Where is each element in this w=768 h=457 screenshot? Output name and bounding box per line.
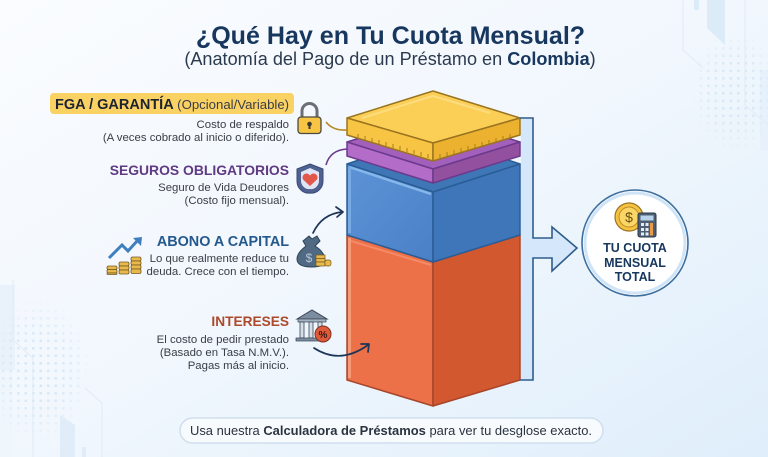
block stack [347, 91, 520, 406]
circle label: TOTAL [615, 270, 656, 284]
title: ¿Qué Hay en Tu Cuota Mensual? [196, 22, 585, 50]
footer pill [180, 418, 603, 443]
label: abono a capital [147, 234, 289, 278]
layer: fga [347, 91, 520, 161]
subtitle: (Anatomía del Pago de un Préstamo en Colombia) [184, 49, 596, 69]
label: abono a capital: deuda. Crece con el tiempo. [147, 266, 289, 278]
label: seguros [110, 162, 289, 207]
label: intereses: INTERESES [211, 314, 289, 329]
connector: fga [326, 122, 347, 130]
icon: shield [297, 164, 323, 193]
label: fga: Costo de respaldo [197, 119, 289, 131]
connector: intereses [314, 344, 369, 356]
layer: seguros [347, 115, 520, 183]
label: seguros: Seguro de Vida Deudores [158, 182, 289, 194]
circle label: MENSUAL [604, 256, 666, 270]
label: abono a capital: ABONO A CAPITAL [157, 234, 289, 250]
connector: capital [313, 207, 343, 233]
connector: seguros [326, 149, 347, 165]
layer: intereses [347, 235, 520, 406]
icon: bank with percent: % [319, 330, 328, 341]
circle label [603, 241, 667, 284]
label: fga: (A veces cobrado al inicio o diferido). [103, 132, 289, 144]
icon: money bag [297, 236, 331, 267]
circle label: TU CUOTA [603, 241, 667, 255]
bracket arrow [520, 118, 577, 380]
label: fga: FGA / GARANTÍA (Opcional/Variable) [55, 96, 289, 113]
label: fga [50, 93, 294, 144]
footer pill: Usa nuestra Calculadora de Préstamos para ver tu desglose exacto. [190, 423, 592, 438]
total circle [582, 190, 688, 296]
icon: bank with percent [296, 310, 331, 342]
label: seguros: (Costo fijo mensual). [185, 195, 289, 207]
label: intereses: Pagas más al inicio. [188, 360, 289, 372]
icon: coin and calculator: $ [625, 209, 633, 225]
icon: growth arrow and coins [107, 237, 142, 274]
label: seguros: SEGUROS OBLIGATORIOS [110, 162, 289, 178]
label: intereses [157, 314, 289, 372]
label: intereses: El costo de pedir prestado [157, 334, 289, 346]
icon: money bag: $ [306, 251, 313, 265]
label: abono a capital: Lo que realmente reduce tu [150, 253, 289, 265]
layer: abono a capital [347, 135, 520, 262]
icon: padlock [298, 104, 321, 134]
label: intereses: (Basado en Tasa N.M.V.). [160, 347, 289, 359]
